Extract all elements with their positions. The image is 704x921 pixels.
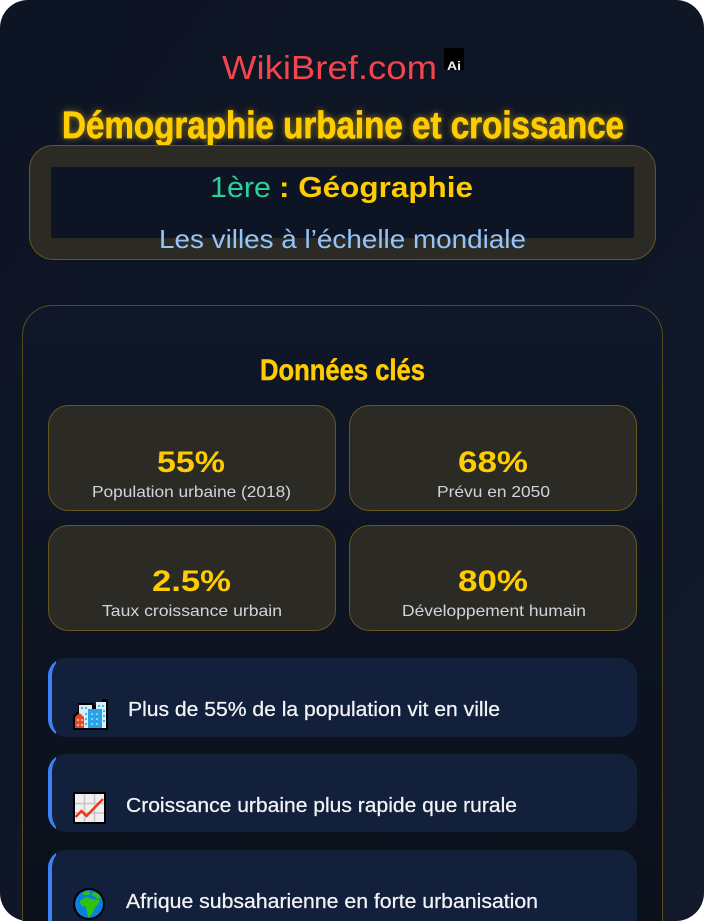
badge: Ai xyxy=(444,48,464,73)
stat card: 80%: 80% xyxy=(458,565,528,598)
text: fact 3: Afrique subsaharienne en forte urbanisation xyxy=(126,891,538,913)
fact: urban growth xyxy=(48,754,637,832)
subject line xyxy=(210,172,473,204)
subject line: 1ère xyxy=(210,172,271,204)
stat card: 55%: 55% xyxy=(157,446,225,479)
fact: urban population xyxy=(48,658,637,737)
text: fact 2: Croissance urbaine plus rapide que rurale xyxy=(126,795,517,817)
stat card: 2.5%: Taux croissance urbain xyxy=(102,603,282,620)
stat card: 80% xyxy=(350,526,636,630)
title: Démographie urbaine et croissance xyxy=(62,105,624,147)
stat card: 68%: Prévu en 2050 xyxy=(437,484,550,501)
icon: globe xyxy=(73,888,105,920)
icon: city xyxy=(73,699,108,730)
fact: sub-Saharan Africa xyxy=(48,850,637,921)
stat card: 2.5%: 2.5% xyxy=(152,565,231,598)
stat card: 2.5% xyxy=(48,526,336,630)
panel: key data xyxy=(22,306,662,921)
brand logo: WikiBref.com xyxy=(222,49,437,86)
heading: données clés: Données clés xyxy=(260,354,425,387)
icon: chart increasing xyxy=(73,792,106,824)
stat card: 55%: Population urbaine (2018) xyxy=(92,484,291,501)
badge: Ai: Ai xyxy=(447,59,461,73)
stat card: 68%: 68% xyxy=(458,446,528,479)
text: fact 1: Plus de 55% de la population vit en ville xyxy=(128,699,500,721)
subtitle: Les villes à l’échelle mondiale xyxy=(159,224,526,254)
stat card: 68% xyxy=(350,406,636,510)
panel: subject header xyxy=(30,146,656,260)
subject line: : Géographie xyxy=(279,172,473,204)
stat card: 80%: Développement humain xyxy=(402,603,586,620)
stat card: 55% xyxy=(48,406,336,510)
title: Démographie urbaine et croissance xyxy=(62,105,624,147)
